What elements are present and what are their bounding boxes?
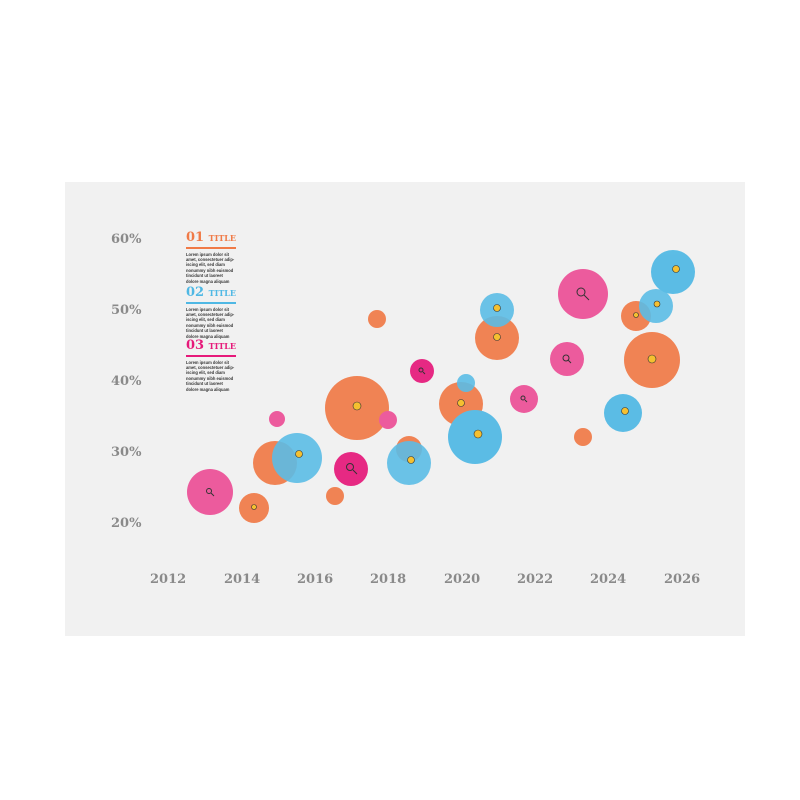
legend 03: Lorem ipsum dolor sit: [186, 360, 229, 364]
legend 01: tincidunt ut laoreet: [186, 273, 223, 278]
legend 03: dolore magna aliquam: [186, 387, 229, 392]
legend 03: [186, 338, 236, 392]
legend 02: [186, 285, 236, 339]
legend 02: iscing elit, sed diam: [186, 317, 225, 322]
x axis labels: 2024: [590, 572, 626, 587]
legend 01: iscing elit, sed diam: [186, 262, 225, 267]
legend 03: amet, consectetuer adip-: [186, 365, 234, 370]
legend 01: amet, consectetuer adip-: [186, 257, 234, 262]
x axis labels: 2026: [664, 572, 700, 587]
x axis labels: 2020: [444, 572, 480, 587]
legend 02: dolore magna aliquam: [186, 334, 229, 339]
legend 01: nonummy nibh euismod: [186, 268, 233, 273]
x axis labels: 2016: [297, 572, 333, 587]
legend 02: 02 TITLE: [186, 285, 236, 300]
y axis labels: [111, 232, 142, 531]
legend 02: amet, consectetuer adip-: [186, 312, 234, 317]
legend 03: iscing elit, sed diam: [186, 370, 225, 375]
legend 02: nonummy nibh euismod: [186, 323, 233, 328]
y axis labels: 40%: [111, 374, 141, 389]
x axis labels: [150, 572, 700, 587]
x axis labels: 2022: [517, 572, 553, 587]
x axis labels: 2012: [150, 572, 186, 587]
icons: [206, 288, 589, 496]
x axis labels: 2018: [370, 572, 406, 587]
y axis labels: 30%: [111, 445, 141, 460]
legend 03: 03 TITLE: [186, 338, 236, 353]
y axis labels: 50%: [111, 303, 141, 318]
legend 01: Lorem ipsum dolor sit: [186, 252, 229, 256]
x axis labels: 2014: [224, 572, 260, 587]
y axis labels: 60%: [111, 232, 141, 247]
legend 01: dolore magna aliquam: [186, 279, 229, 284]
y axis labels: 20%: [111, 516, 141, 531]
legend 01: [186, 230, 236, 284]
legend 03: nonummy nibh euismod: [186, 376, 233, 381]
legend 03: tincidunt ut laoreet: [186, 381, 223, 386]
legend 02: tincidunt ut laoreet: [186, 328, 223, 333]
legend 02: Lorem ipsum dolor sit: [186, 306, 229, 312]
legend 01: 01 TITLE: [186, 230, 236, 245]
panel: chart background: [65, 182, 745, 636]
